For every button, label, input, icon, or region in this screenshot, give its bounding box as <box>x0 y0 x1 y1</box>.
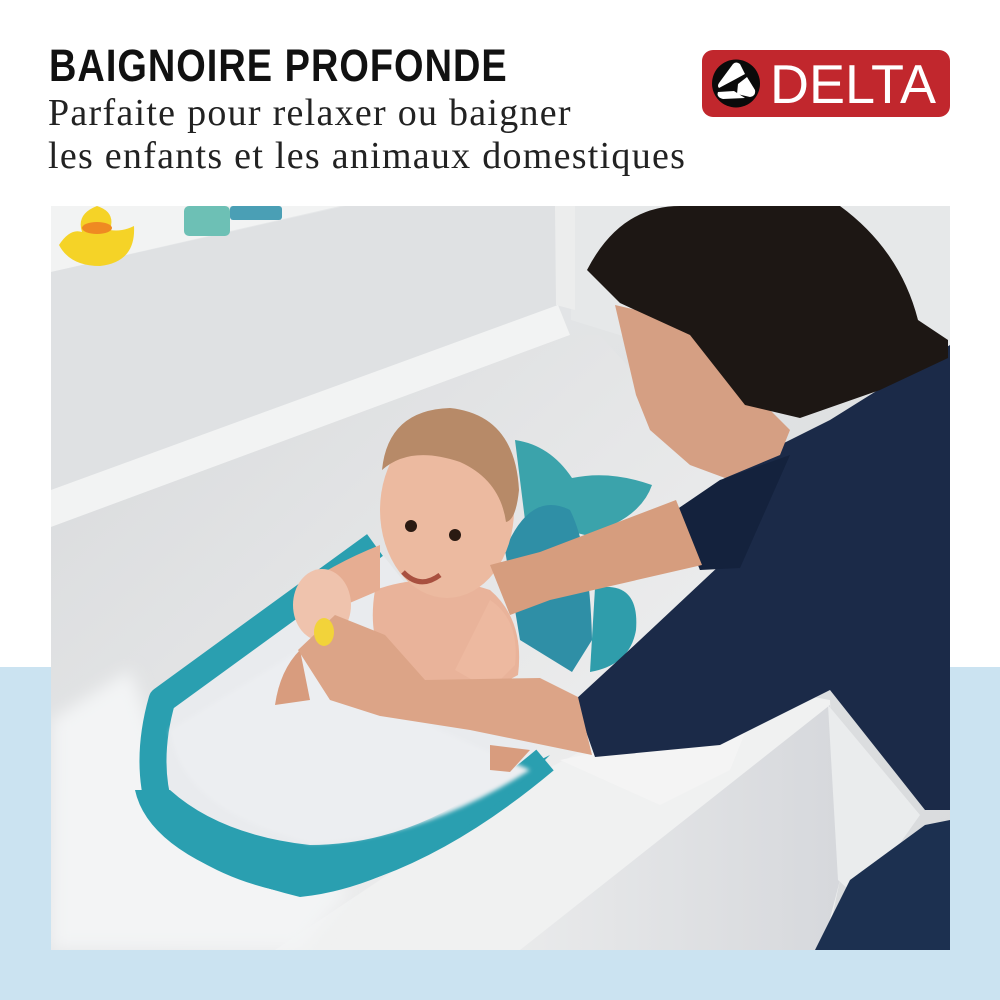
woman's jeans <box>815 820 950 950</box>
photo: baby in whale tub held by a woman in a white bathtub <box>51 206 950 950</box>
baby head <box>380 408 519 598</box>
woman's sweater <box>575 345 950 810</box>
wall <box>51 206 950 950</box>
tub interior <box>51 335 730 950</box>
woman's face <box>615 305 790 478</box>
tub front wall <box>275 680 920 950</box>
foam left <box>51 670 350 950</box>
title: BAIGNOIRE PROFONDE <box>49 40 508 91</box>
woman's hair <box>587 206 948 418</box>
rubber duck <box>59 206 134 266</box>
baby body <box>275 545 530 772</box>
subtitle: les enfants et les animaux domestiques <box>48 135 686 177</box>
logo: Delta <box>702 50 950 117</box>
subtitle: Parfaite pour relaxer ou baigner <box>48 92 572 134</box>
logo: Delta: DELTA <box>770 53 936 115</box>
woman's arms <box>298 500 702 755</box>
subtitle <box>48 92 686 177</box>
tub rim <box>51 305 570 527</box>
bottles <box>184 206 282 236</box>
light blue background band <box>0 667 1000 1000</box>
whale tail <box>505 440 652 672</box>
yellow sponge <box>314 618 334 646</box>
shelf <box>51 206 575 490</box>
whale tub ring <box>135 545 550 897</box>
